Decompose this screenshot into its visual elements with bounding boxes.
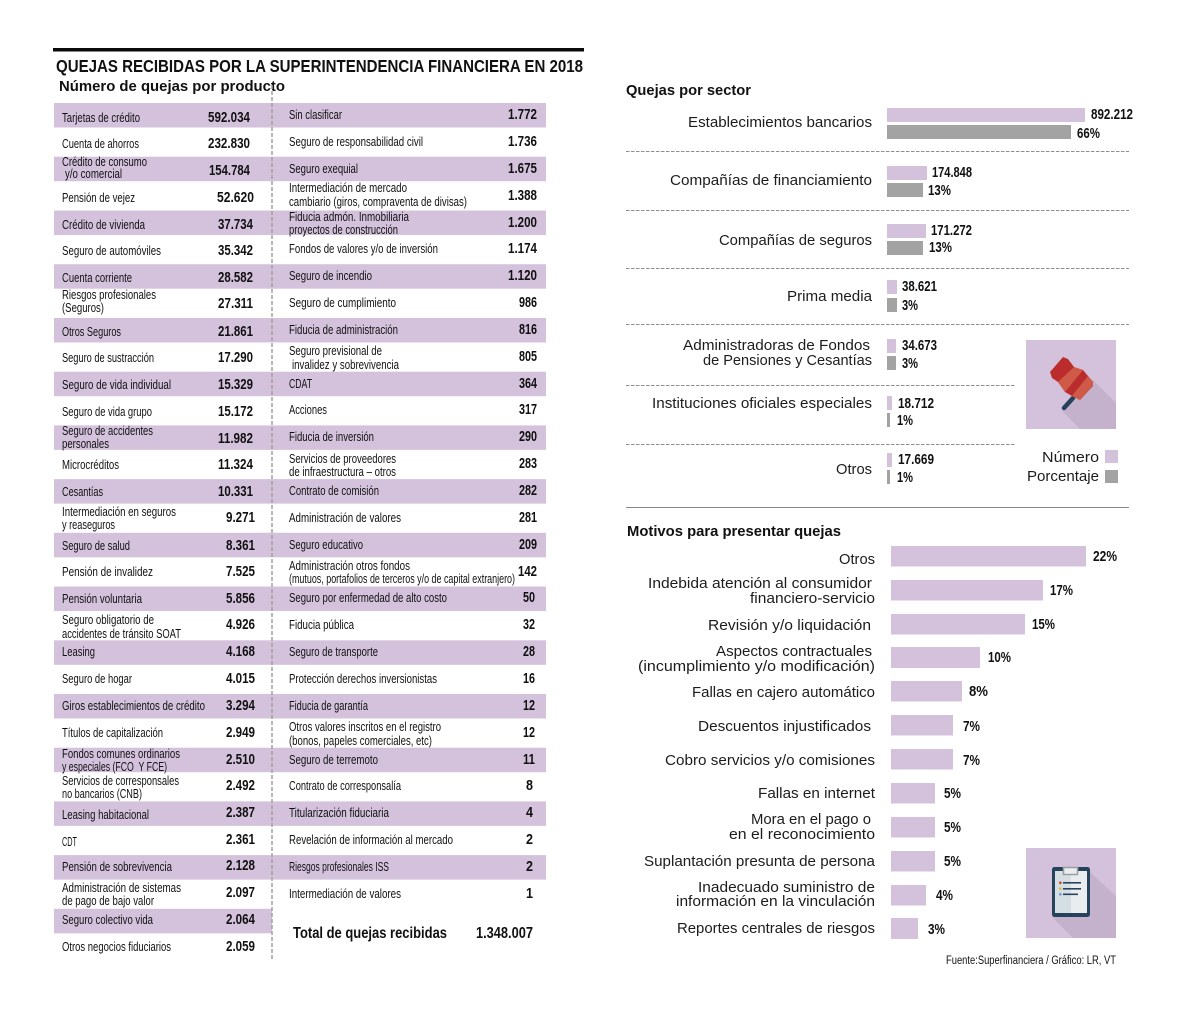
row: Seguro colectivo vida (54, 909, 272, 933)
row: Pensión de invalidez: 7.525 (226, 563, 255, 580)
row: Seguro de hogar (62, 670, 255, 687)
row: Sin clasificar (272, 103, 546, 128)
row: Intermediación en seguros: 9.271 (226, 509, 255, 526)
motivo: Aspectos contractuales: Aspectos contractuales (716, 643, 872, 660)
motivo: Inadecuado suministro: Inadecuado suministro de (698, 879, 875, 896)
row: Microcréditos: 11.324 (218, 456, 254, 473)
row: Seguro educativo: Seguro educativo (289, 538, 363, 552)
row: Protección derechos inversionistas: Protección derechos inversionistas (289, 672, 437, 686)
row: Fondos de valores: 1.174 (508, 240, 538, 257)
row: Intermediación de valores: 1 (526, 885, 533, 902)
motivo: Indebida atención: 17% (1050, 582, 1073, 599)
panel: table right column (272, 103, 546, 942)
row: Cesantías: 10.331 (218, 483, 253, 500)
row: Giros establecimientos de crédito: 3.294 (226, 697, 256, 714)
row: Riesgos profesionales ISS: Riesgos profesionales ISS (289, 860, 389, 874)
sector: Instituciones oficiales especiales: 1% (897, 412, 913, 429)
row: Administración de sistemas (62, 881, 255, 908)
row: Administración de valores (289, 509, 537, 526)
row: Riesgos profesionales (62, 288, 253, 315)
row: Leasing (54, 640, 272, 665)
row: Cuenta corriente: Cuenta corriente (62, 271, 132, 285)
row: Títulos de capitalización: 2.949 (226, 724, 255, 741)
top rule (53, 48, 584, 52)
row: Seguro de sustracción (62, 349, 253, 366)
row: Servicios de proveedores: Servicios de proveedores (289, 452, 396, 466)
row: Administración de sistemas: de pago de bajo valor (62, 894, 154, 908)
row: Pensión de sobrevivencia (54, 855, 272, 880)
motivo: Cobro servicios y/o comisiones: Cobro servicios y/o comisiones (665, 752, 875, 769)
row: Intermediación en seguros: y reaseguros (62, 518, 115, 532)
row: Intermediación de mercado cambiario: Intermediación de mercado (289, 181, 407, 195)
row: Pensión de vejez: 52.620 (217, 189, 254, 206)
row: Títulos de capitalización (62, 724, 255, 741)
row: Seguro colectivo vida: Seguro colectivo vida (62, 913, 153, 927)
row: Seguro de incendio: Seguro de incendio (289, 269, 372, 283)
row: Sin clasificar: Sin clasificar (289, 108, 342, 122)
row: Seguro de automóviles: 35.342 (218, 242, 253, 259)
row: Seguro de sustracción: Seguro de sustracción (62, 351, 154, 365)
sector: Otros: 1% (897, 469, 913, 486)
row: Seguro de accidentes personales (54, 424, 272, 451)
row: Seguro de sustracción: 17.290 (218, 349, 253, 366)
heading: número de quejas por producto: Número de quejas por producto (59, 78, 285, 95)
row: Seguro de hogar: Seguro de hogar (62, 672, 132, 686)
row: Giros establecimientos de crédito: Giros establecimientos de crédito (62, 699, 205, 713)
row: Fiducia de inversión: 290 (519, 428, 537, 445)
row: Seguro de transporte: 28 (523, 643, 535, 660)
row: Cesantías (54, 479, 272, 504)
row: Administración otros fondos: 142 (518, 563, 537, 580)
row: Otros negocios fiduciarios: 2.059 (226, 938, 255, 955)
row: Intermediación en seguros: Intermediación en seguros (62, 505, 176, 519)
source note: Fuente:Superfinanciera / Gráfico: LR, VT (946, 955, 1116, 967)
row: Fondos comunes ordinarios: y especiales (FCO Y FCE) (62, 760, 167, 774)
row: Seguro por enfermedad de alto costo (272, 586, 546, 611)
motivo: Revisión y/o liquidación: Revisión y/o liquidación (708, 617, 871, 634)
row: Cuenta de ahorros: Cuenta de ahorros (62, 137, 139, 151)
row: Administración otros fondos: Administración otros fondos (289, 559, 410, 573)
row: Intermediación de valores: Intermediación de valores (289, 887, 401, 901)
row: Riesgos profesionales: 27.311 (218, 295, 253, 312)
sector: Compañías de financiamiento: 174.848 (932, 164, 972, 181)
row: Seguro de accidentes personales: personales (62, 437, 109, 451)
row: Crédito de consumo: y/o comercial (65, 167, 122, 181)
row: Otros Seguros: Otros Seguros (62, 325, 121, 339)
row: Fiducia de administración (272, 318, 546, 342)
row: Fiducia pública (289, 616, 535, 633)
row: Pensión voluntaria: 5.856 (226, 590, 255, 607)
icon: pushpin (1026, 340, 1116, 429)
row: Seguro previsional: invalidez y sobrevivencia (292, 358, 399, 372)
row: Acciones (289, 401, 537, 418)
row: Titularización fiduciaria: Titularización fiduciaria (289, 806, 389, 820)
row: Contrato de corresponsalía: Contrato de corresponsalía (289, 779, 401, 793)
title: QUEJAS RECIBIDAS POR LA SUPERINTENDENCIA FINANCIERA EN 2018 (56, 56, 583, 76)
row: Servicios de corresponsales: 2.492 (226, 777, 255, 794)
row: Seguro por enfermedad de alto costo: 50 (523, 589, 535, 606)
row: Seguro educativo: 209 (519, 536, 537, 553)
row: Contrato de corresponsalía (289, 777, 533, 794)
row: Seguro de terremoto (272, 748, 546, 772)
sector: Prima media (787, 278, 937, 314)
row: Fiducia pública: 32 (523, 616, 535, 633)
row: Seguro obligatorio de accidentes (62, 613, 255, 641)
motivo: Mora en el pago: en el reconocimiento (729, 826, 875, 843)
motivo: Fallas en cajero automático (692, 681, 988, 702)
row: Fiducia de administración: Fiducia de administración (289, 323, 398, 337)
sector: Compañías de financiamiento (670, 164, 972, 199)
row: Pensión de invalidez: Pensión de invalidez (62, 565, 153, 579)
row: Fiducia de garantía: 12 (523, 697, 535, 714)
row: Sin clasificar: 1.772 (508, 106, 537, 123)
row: Seguro de vida grupo (62, 403, 253, 420)
row: Pensión voluntaria: Pensión voluntaria (62, 592, 142, 606)
row: Seguro de accidentes personales: 11.982 (218, 430, 253, 447)
row: Riesgos profesionales ISS: 2 (526, 858, 533, 875)
row: Fiducia de inversión: Fiducia de inversión (289, 430, 374, 444)
row: Seguro de cumplimiento (289, 294, 537, 311)
row: Contrato de comisión (272, 479, 546, 504)
row: Servicios de proveedores: de infraestructura – otros (289, 465, 396, 479)
row: Seguro de automóviles: Seguro de automóviles (62, 244, 161, 258)
row: Servicios de proveedores (289, 452, 537, 479)
motivo: Suplantación presunta de persona (644, 851, 961, 872)
row: Protección derechos inversionistas (289, 670, 535, 687)
row: Cuenta corriente (54, 264, 272, 289)
row: Seguro de terremoto: Seguro de terremoto (289, 753, 378, 767)
row: Seguro previsional: 805 (519, 348, 537, 365)
icon: clipboard (1026, 848, 1116, 938)
row: Acciones: Acciones (289, 403, 327, 417)
row: Seguro de hogar: 4.015 (226, 670, 255, 687)
row: Tarjetas de crédito: Tarjetas de crédito (62, 111, 140, 125)
heading: quejas por sector: Quejas por sector (626, 82, 751, 99)
row: Seguro exequial (272, 157, 546, 181)
row: Seguro de incendio (272, 264, 546, 289)
row: Otros Seguros (54, 318, 272, 342)
sector: Instituciones oficiales especiales: Instituciones oficiales especiales (652, 395, 872, 412)
sector: Administradoras de Fondos: de Pensiones y Cesantías (703, 352, 872, 369)
row: Servicios de proveedores: 283 (519, 455, 537, 472)
motivo: Indebida atención (648, 575, 1073, 607)
row: Pensión de vejez (62, 189, 254, 206)
legend (1027, 449, 1118, 485)
row: Acciones: 317 (519, 401, 537, 418)
row: Seguro exequial: 1.675 (508, 160, 537, 177)
row: Seguro obligatorio de accidentes: 4.926 (226, 616, 255, 633)
row: Seguro de responsabilidad civil: 1.736 (508, 133, 537, 150)
row: Titularización fiduciaria: 4 (526, 804, 534, 821)
motivo: Cobro servicios y/o comisiones: 7% (963, 752, 980, 769)
motivo: Aspectos contractuales (638, 643, 1011, 675)
row: Seguro previsional: Seguro previsional de (289, 344, 382, 358)
row: Fondos de valores (289, 240, 538, 257)
row: Servicios de corresponsales (62, 774, 255, 801)
motivo: Fallas en internet (758, 783, 961, 804)
row: Administración de sistemas: Administración de sistemas (62, 881, 181, 895)
row: Seguro exequial: Seguro exequial (289, 162, 358, 176)
row: Seguro educativo (272, 533, 546, 557)
row: Otros Seguros: 21.861 (218, 323, 253, 340)
row: Administración de valores: Administración de valores (289, 511, 401, 525)
row: Otros negocios fiduciarios (62, 938, 255, 955)
motivo: Descuentos injustificados: 7% (963, 718, 980, 735)
motivo: Mora en el pago: 5% (944, 819, 961, 836)
row: Riesgos profesionales: Riesgos profesionales (62, 288, 156, 302)
row: Seguro de transporte: Seguro de transporte (289, 645, 378, 659)
row: Seguro de accidentes personales: Seguro de accidentes (62, 424, 153, 438)
row: Riesgos profesionales ISS (272, 855, 546, 880)
motivo: Otros: Otros (839, 551, 875, 568)
row: Seguro previsional (289, 344, 537, 372)
row: Otros valores inscritos (289, 720, 535, 748)
row: Protección derechos inversionistas: 16 (523, 670, 535, 687)
motivo: Otros (839, 546, 1117, 568)
row: CDT: 2.361 (226, 831, 255, 848)
row: Titularización fiduciaria (272, 801, 546, 826)
row: Crédito de vivienda (54, 210, 272, 235)
row: Microcréditos (62, 456, 254, 473)
row: Seguro de transporte (272, 640, 546, 665)
motivo: Indebida atención: financiero-servicio (750, 590, 875, 607)
sector: Compañías de seguros: Compañías de seguros (719, 232, 872, 249)
row: CDT: CDT (62, 835, 77, 849)
chart: quejas por sector (652, 106, 1133, 486)
row: Seguro de vida grupo: 15.172 (218, 403, 253, 420)
sector: Otros (836, 451, 934, 486)
row: Intermediación de mercado cambiario: 1.388 (508, 187, 537, 204)
sector: Instituciones oficiales especiales: 18.712 (898, 395, 934, 412)
motivo: Reportes centrales de riesgos (677, 918, 945, 939)
row: Seguro de terremoto: 11 (523, 751, 535, 768)
sector: Instituciones oficiales especiales (652, 395, 934, 429)
row: Fondos comunes ordinarios: Fondos comunes ordinarios (62, 747, 180, 761)
row: Fondos de valores: Fondos de valores y/o de inversión (289, 242, 438, 256)
row: CDAT: CDAT (289, 377, 312, 391)
row: Cuenta corriente: 28.582 (218, 269, 253, 286)
row: total de quejas recibidas: 1.348.007 (476, 925, 533, 942)
row: Cesantías: Cesantías (62, 485, 103, 499)
motivo: Suplantación presunta de persona: 5% (944, 853, 961, 870)
row: Fondos comunes ordinarios (54, 747, 272, 774)
row: Tarjetas de crédito: 592.034 (208, 109, 250, 126)
row: Intermediación de mercado cambiario: cambiario (giros, compraventa de divisas) (289, 195, 467, 209)
row: Fiducia de garantía: Fiducia de garantía (289, 699, 368, 713)
row: Crédito de consumo (54, 155, 272, 181)
row: Fondos comunes ordinarios: 2.510 (226, 751, 255, 768)
row: Contrato de comisión: 282 (519, 482, 537, 499)
row: Seguro colectivo vida: 2.064 (226, 911, 256, 928)
row: Seguro de salud (54, 533, 272, 557)
row: Pensión voluntaria (54, 586, 272, 611)
row: Fiducia pública: Fiducia pública (289, 618, 354, 632)
row: Intermediación de mercado cambiario (289, 181, 537, 209)
motivo: Aspectos contractuales: (incumplimiento y/o modificación) (638, 658, 875, 675)
row: CDAT: 364 (519, 375, 537, 392)
heading: motivos para presentar quejas: Motivos para presentar quejas (627, 523, 841, 540)
motivo: Revisión y/o liquidación: 15% (1032, 616, 1055, 633)
row: Seguro de salud: Seguro de salud (62, 539, 130, 553)
sector: Establecimientos bancarios (688, 106, 1133, 142)
row: total de quejas recibidas: Total de quejas recibidas (293, 925, 447, 942)
row: Leasing habitacional (54, 801, 272, 826)
row: Fiducia admón. Inmobiliaria: 1.200 (508, 214, 537, 231)
row: Seguro de vida individual (54, 372, 272, 396)
row: Crédito de consumo: 154.784 (209, 162, 250, 179)
row: Administración de sistemas: 2.097 (226, 884, 255, 901)
motivo: Reportes centrales de riesgos: 3% (928, 921, 945, 938)
sector: Administradoras de Fondos: 3% (902, 355, 918, 372)
row: Fiducia admón. Inmobiliaria (272, 210, 546, 237)
legend: Porcentaje (1027, 468, 1099, 485)
sector: Establecimientos bancarios: 66% (1077, 125, 1100, 142)
row: Microcréditos: Microcréditos (62, 458, 119, 472)
row: Seguro de vida individual: Seguro de vida individual (62, 378, 171, 392)
motivo: Fallas en internet: 5% (944, 785, 961, 802)
row: Giros establecimientos de crédito (54, 694, 272, 718)
sector: Compañías de financiamiento: Compañías de financiamiento (670, 172, 872, 189)
motivo: Otros: 22% (1093, 548, 1117, 565)
row: Seguro de responsabilidad civil: Seguro de responsabilidad civil (289, 135, 423, 149)
row: Servicios de corresponsales: no bancarios (CNB) (62, 787, 142, 801)
motivo: Inadecuado suministro: 4% (936, 887, 953, 904)
row: Seguro de salud: 8.361 (226, 537, 255, 554)
row: Otros negocios fiduciarios: Otros negocios fiduciarios (62, 940, 171, 954)
row: Títulos de capitalización: Títulos de capitalización (62, 726, 163, 740)
row: Seguro obligatorio de accidentes: Seguro obligatorio de (62, 613, 154, 627)
panel: table left column (54, 103, 272, 955)
motivo: Aspectos contractuales: 10% (988, 649, 1011, 666)
row: Crédito de vivienda: Crédito de vivienda (62, 218, 145, 232)
row: Fiducia admón. Inmobiliaria: Fiducia admón. Inmobiliaria (289, 210, 409, 224)
row: Seguro de cumplimiento: 986 (519, 294, 537, 311)
motivo: Fallas en internet: Fallas en internet (758, 785, 876, 802)
row: Contrato de comisión: Contrato de comisión (289, 484, 379, 498)
sector: Otros: 17.669 (898, 451, 934, 468)
row: Cuenta de ahorros: 232.830 (208, 135, 250, 152)
row: Otros valores inscritos: Otros valores inscritos en el registro (289, 720, 441, 734)
sector: Compañías de seguros: 171.272 (931, 222, 972, 239)
motivo: Descuentos injustificados: Descuentos injustificados (698, 718, 871, 735)
row: Seguro obligatorio de accidentes: accidentes de tránsito SOAT (62, 627, 181, 641)
motivo: Revisión y/o liquidación (708, 614, 1055, 634)
sector: Establecimientos bancarios: 892.212 (1091, 106, 1133, 123)
row: Seguro de incendio: 1.120 (508, 267, 537, 284)
sector: Compañías de financiamiento: 13% (928, 182, 951, 199)
row: Leasing habitacional: 2.387 (226, 804, 255, 821)
sector: Prima media: 3% (902, 297, 918, 314)
row: Administración de valores: 281 (519, 509, 537, 526)
motivo: Indebida atención: Indebida atención al consumidor (648, 575, 872, 592)
legend: Número (1042, 449, 1099, 466)
row: Contrato de corresponsalía: 8 (526, 777, 533, 794)
row: Seguro de cumplimiento: Seguro de cumplimiento (289, 296, 396, 310)
row: Fiducia de inversión (272, 425, 546, 450)
motivo: Reportes centrales de riesgos: Reportes centrales de riesgos (677, 920, 875, 937)
row: Pensión de vejez: Pensión de vejez (62, 191, 135, 205)
sector: Prima media: 38.621 (902, 278, 937, 295)
row: Revelación de información al mercado: 2 (526, 831, 533, 848)
motivo: Fallas en cajero automático: Fallas en cajero automático (692, 684, 875, 701)
motivo: Inadecuado suministro (676, 879, 953, 910)
sector: Administradoras de Fondos: 34.673 (902, 337, 937, 354)
sector: Compañías de seguros (719, 222, 972, 256)
motivo: Mora en el pago: Mora en el pago o (751, 811, 871, 828)
row: Seguro de vida grupo: Seguro de vida grupo (62, 405, 152, 419)
row: Otros valores inscritos: (bonos, papeles comerciales, etc) (289, 734, 432, 748)
row: Seguro por enfermedad de alto costo: Seguro por enfermedad de alto costo (289, 591, 447, 605)
row: Seguro de vida individual: 15.329 (218, 376, 253, 393)
row: Fiducia de administración: 816 (519, 321, 537, 338)
motivo: Suplantación presunta de persona: Suplantación presunta de persona (644, 853, 876, 870)
row: Revelación de información al mercado: Revelación de información al mercado (289, 833, 453, 847)
row: Tarjetas de crédito (54, 103, 272, 128)
motivo: Inadecuado suministro: información en la vinculación (676, 893, 875, 910)
row: Crédito de consumo: Crédito de consumo (62, 155, 147, 169)
row: Intermediación en seguros (62, 505, 255, 532)
row: Leasing: 4.168 (226, 643, 255, 660)
row: Leasing habitacional: Leasing habitacional (62, 808, 149, 822)
row: Seguro de automóviles (62, 242, 253, 259)
row: Otros valores inscritos: 12 (523, 724, 535, 741)
row: Fiducia de garantía (272, 694, 546, 718)
row: Servicios de corresponsales: Servicios de corresponsales (62, 774, 179, 788)
chart: motivos para presentar quejas (638, 546, 1117, 939)
row: Cuenta de ahorros (62, 135, 250, 152)
row: Pensión de invalidez (62, 563, 255, 580)
row: CDT (62, 831, 255, 849)
sector: Compañías de seguros: 13% (929, 239, 952, 256)
sector: Administradoras de Fondos (683, 337, 937, 372)
row: Intermediación de valores (289, 885, 533, 902)
sector: Prima media: Prima media (787, 288, 873, 305)
row: Seguro de responsabilidad civil (289, 133, 537, 150)
row: Leasing: Leasing (62, 645, 95, 659)
row: Pensión de sobrevivencia: Pensión de sobrevivencia (62, 860, 172, 874)
row: Riesgos profesionales: (Seguros) (62, 301, 104, 315)
sector: Establecimientos bancarios: Establecimientos bancarios (688, 114, 872, 131)
sector: Otros: Otros (836, 461, 872, 478)
row: Fiducia admón. Inmobiliaria: proyectos de construcción (289, 223, 398, 237)
row: Crédito de vivienda: 37.734 (218, 216, 253, 233)
row: Pensión de sobrevivencia: 2.128 (226, 857, 255, 874)
row: CDAT (272, 372, 546, 396)
motivo: Mora en el pago (729, 811, 961, 843)
motivo: Descuentos injustificados (698, 715, 980, 736)
motivo: Fallas en cajero automático: 8% (969, 683, 988, 700)
sector: Administradoras de Fondos: Administradoras de Fondos (683, 337, 870, 354)
row: Administración otros fondos: (mutuos, portafolios de terceros y/o de capital extranjero) (289, 572, 515, 586)
row: Administración otros fondos (289, 559, 537, 586)
motivo: Cobro servicios y/o comisiones (665, 749, 980, 770)
